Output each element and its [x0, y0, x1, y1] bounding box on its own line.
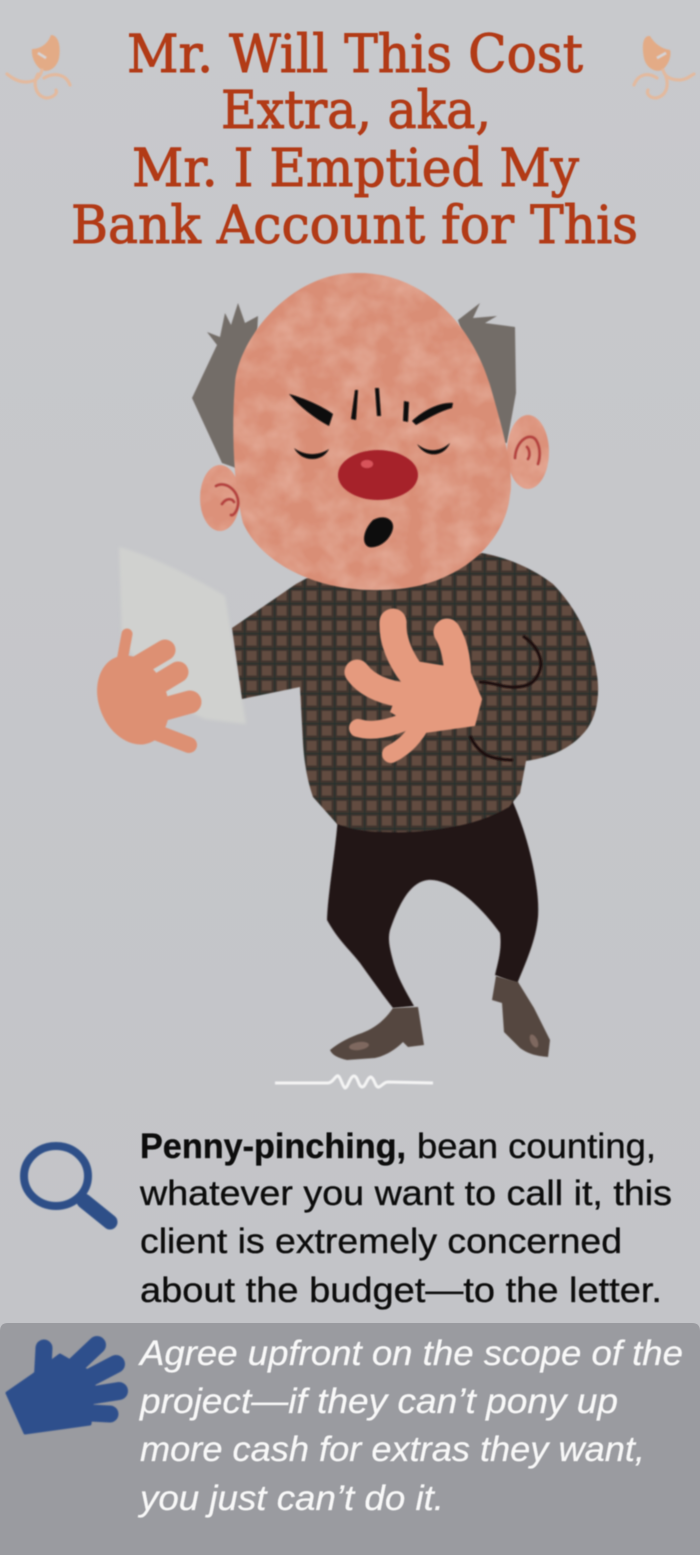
- text block: description: Penny-pinching,: [140, 1127, 406, 1166]
- sweater: [232, 553, 598, 832]
- hair right: [458, 303, 516, 443]
- divider flourish: [275, 1076, 433, 1088]
- title: Extra, aka,: [221, 81, 491, 141]
- frown lines: [351, 390, 358, 420]
- text block: advice: you just can’t do it.: [138, 1479, 444, 1518]
- shoe highlights: [349, 1033, 540, 1051]
- icon: left flower ornament: [7, 35, 70, 98]
- panel: advice: [0, 1323, 700, 1555]
- mouth: [364, 517, 393, 547]
- text block: advice: Agree upfront on the scope of the: [138, 1334, 683, 1373]
- text block: advice: [138, 1334, 683, 1518]
- icon: right flower ornament: [634, 36, 694, 98]
- text block: description: bean counting,: [417, 1127, 656, 1166]
- ear details: [216, 484, 238, 515]
- right shoe: [492, 976, 550, 1057]
- title: Mr. Will This Cost: [127, 25, 583, 85]
- receipt paper: [119, 547, 246, 724]
- text block: description: [139, 1127, 672, 1310]
- legs and trousers: [327, 800, 538, 1008]
- hair left: [192, 303, 258, 473]
- text block: description: whatever you want to call it, this: [139, 1174, 672, 1213]
- closed eyes: [294, 448, 329, 459]
- text block: advice: more cash for extras they want,: [140, 1430, 645, 1469]
- icon: blue hand: [7, 1345, 119, 1433]
- title: Mr. I Emptied My: [132, 139, 580, 199]
- left hand: [84, 634, 190, 755]
- illustration: stressed client: [84, 270, 598, 1060]
- nose: [338, 450, 418, 500]
- face features: [289, 388, 453, 547]
- title: [71, 25, 638, 256]
- head and ears: [195, 270, 555, 595]
- text block: advice: project—if they can’t pony up: [139, 1382, 618, 1421]
- right hand: [357, 622, 482, 754]
- eyebrows: [289, 394, 333, 426]
- text block: description: client is extremely concerned: [140, 1222, 622, 1261]
- icon: magnifying glass: [24, 1146, 110, 1222]
- title: Bank Account for This: [71, 196, 638, 256]
- text block: description: about the budget—to the letter.: [140, 1271, 662, 1310]
- left shoe: [330, 1007, 424, 1060]
- arm lines: [470, 636, 541, 760]
